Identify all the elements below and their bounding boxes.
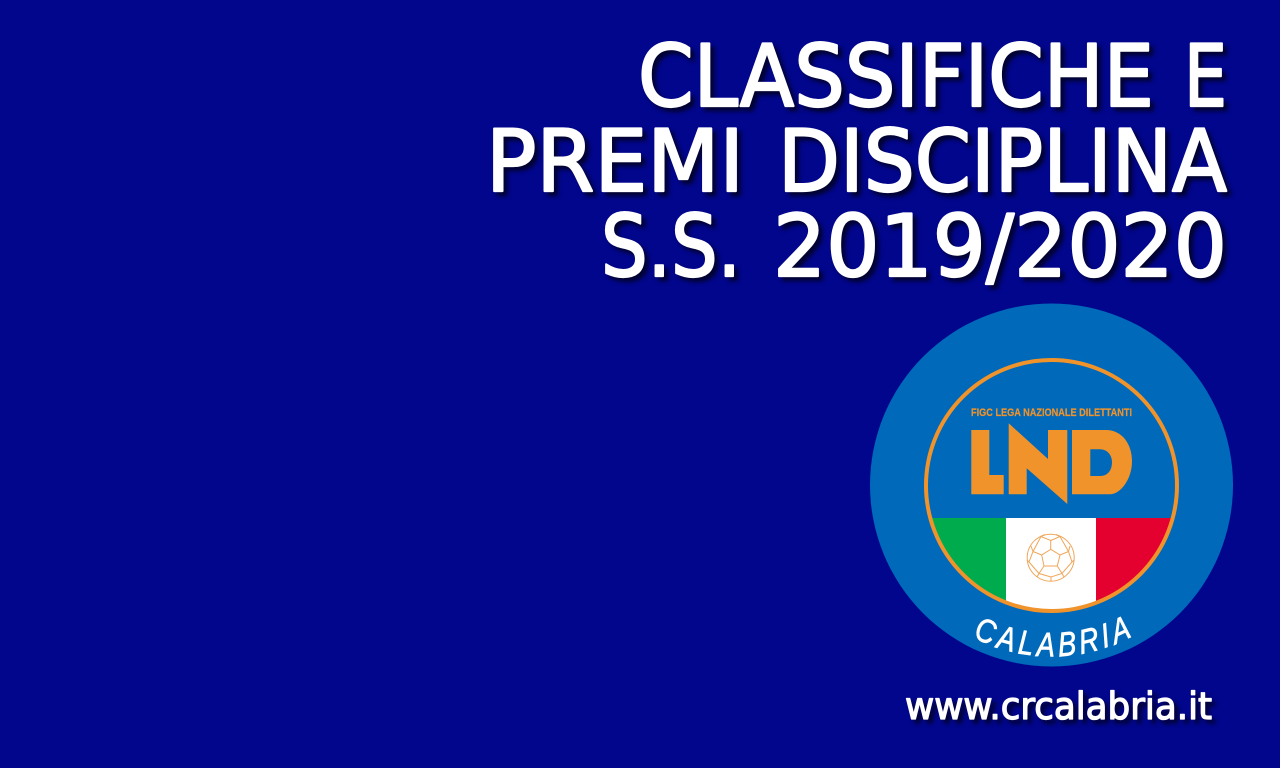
icon: football (1027, 534, 1074, 581)
website url: www.crcalabria.it (905, 685, 1212, 728)
logo tricolore flag (932, 518, 1171, 609)
logo CALABRIA lettering: CALABRIA (976, 616, 1132, 657)
title: 2019/2020 (773, 197, 1227, 297)
title (486, 27, 1227, 297)
title: DISCIPLINA (778, 112, 1227, 212)
title: S.S. (601, 197, 741, 297)
logo top caption: FIGC LEGA NAZIONALE DILETTANTI (971, 407, 1132, 419)
title: E (1184, 27, 1227, 127)
logo outer blue disc (870, 304, 1233, 666)
logo: LND Calabria badge (870, 304, 1233, 666)
logo orange ring (926, 360, 1177, 611)
title: CLASSIFICHE (638, 27, 1154, 127)
logo LND mark (971, 423, 1132, 504)
title: PREMI (486, 112, 744, 212)
